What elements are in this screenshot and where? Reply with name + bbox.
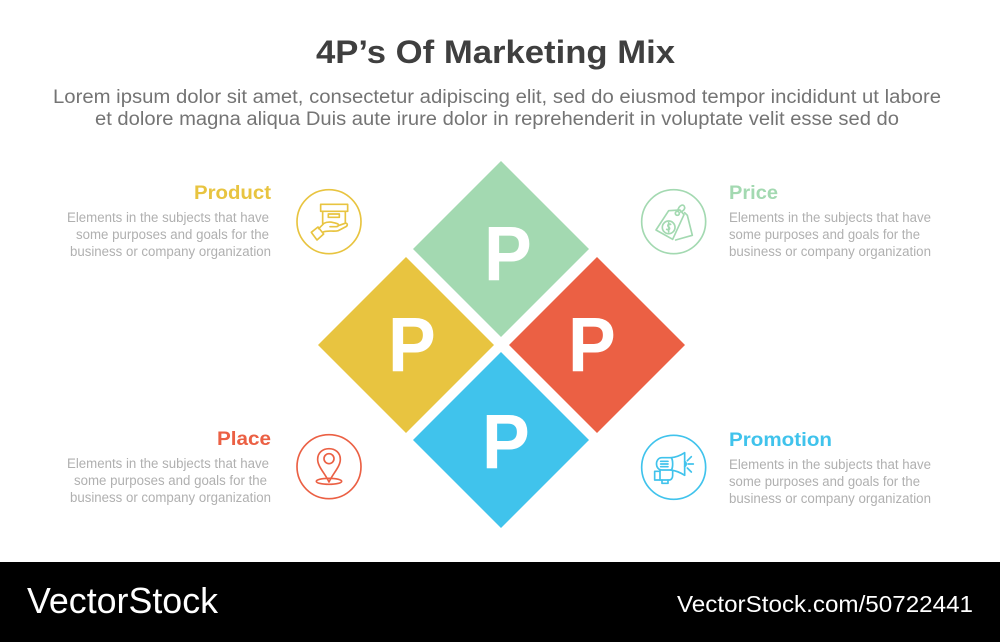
diamond: top P (price): [413, 161, 589, 337]
heading: place: Place: [217, 429, 271, 450]
title: 4P’s Of Marketing Mix: [316, 34, 675, 70]
subtitle: et dolore magna aliqua Duis aute irure dolor in reprehenderit in voluptate velit esse sed do: [95, 109, 899, 130]
footer bar: [0, 562, 1000, 642]
text block: price: Elements in the subjects that have: [729, 210, 931, 225]
subtitle: [53, 87, 941, 130]
text block: price: [729, 210, 931, 259]
diamond: right P (place): P: [568, 302, 616, 388]
text block: product: [67, 210, 271, 259]
text block: place: [67, 456, 271, 505]
icon: box on hand: [297, 190, 361, 254]
panel: price: [642, 183, 931, 259]
heading: price: Price: [729, 183, 778, 204]
text block: product: business or company organization: [70, 244, 271, 259]
diamond: left P (product): [318, 257, 494, 433]
text block: price: business or company organization: [729, 244, 931, 259]
panel: product: [67, 183, 361, 259]
diamond: bottom P (promotion): [413, 352, 589, 528]
panel: promotion: [642, 430, 931, 506]
text block: promotion: some purposes and goals for the: [729, 474, 920, 489]
text block: place: some purposes and goals for the: [74, 473, 267, 488]
heading: product: Product: [194, 183, 272, 204]
footer logo: VectorStock: [27, 580, 219, 621]
text block: place: Elements in the subjects that have: [67, 456, 269, 471]
diamond: top P (price): P: [484, 211, 532, 297]
icon: map pin: [297, 435, 361, 499]
text block: promotion: [729, 457, 931, 506]
text block: price: some purposes and goals for the: [729, 227, 920, 242]
diamond: bottom P (promotion): P: [482, 399, 530, 485]
subtitle: Lorem ipsum dolor sit amet, consectetur adipiscing elit, sed do eiusmod tempor incididunt ut labore: [53, 87, 941, 108]
panel: place: [67, 429, 361, 505]
text block: place: business or company organization: [70, 490, 271, 505]
text block: promotion: Elements in the subjects that have: [729, 457, 931, 472]
diamond: left P (product): P: [388, 302, 436, 388]
footer image id: VectorStock.com/50722441: [677, 591, 973, 617]
heading: promotion: Promotion: [729, 430, 832, 451]
text block: promotion: business or company organization: [729, 491, 931, 506]
text block: product: some purposes and goals for the: [76, 227, 269, 242]
diamond: right P (place): [509, 257, 685, 433]
text block: product: Elements in the subjects that have: [67, 210, 269, 225]
icon: price tags: [642, 190, 706, 254]
icon: megaphone: [642, 435, 706, 499]
